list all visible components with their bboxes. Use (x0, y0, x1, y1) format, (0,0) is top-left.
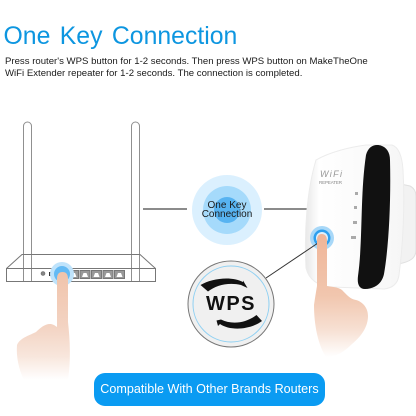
router port: power (41, 272, 45, 275)
router port: usb (49, 272, 56, 276)
device sublabel: REPEATER (319, 180, 343, 185)
hand: device (314, 234, 368, 357)
compatibility button (94, 373, 325, 406)
status lights (351, 192, 358, 239)
title: One Key Connection (4, 23, 237, 50)
leader line (266, 243, 318, 278)
router ethernet ports (68, 270, 124, 278)
black band (358, 145, 390, 289)
connector line right (264, 208, 308, 210)
wps label: WPS (206, 293, 256, 315)
one key connection circles (192, 175, 262, 245)
wps top arrow (200, 278, 248, 292)
description text: WiFi Extender repeater for 1-2 seconds. The connection is completed. (5, 68, 302, 79)
description text: Press router's WPS button for 1-2 seconds. Then press WPS button on MakeTheOne (5, 56, 368, 67)
router body (6, 254, 156, 282)
wps bottom arrow (216, 315, 262, 329)
router button glow (50, 262, 74, 286)
connector line left (143, 208, 187, 210)
compatibility button: Compatible With Other Brands Routers (100, 382, 319, 396)
device body (305, 145, 404, 289)
circle label: One Key (208, 200, 246, 211)
right antenna (132, 122, 140, 281)
plug (396, 183, 416, 264)
extender device (305, 145, 416, 289)
description text (5, 56, 368, 79)
device label: WiFi (320, 169, 343, 179)
wps circle (188, 261, 274, 347)
hand: router (17, 272, 70, 380)
left antenna (24, 122, 32, 281)
one key connection circles: Connection (202, 209, 252, 220)
router (6, 122, 156, 282)
device button glow (310, 226, 334, 250)
